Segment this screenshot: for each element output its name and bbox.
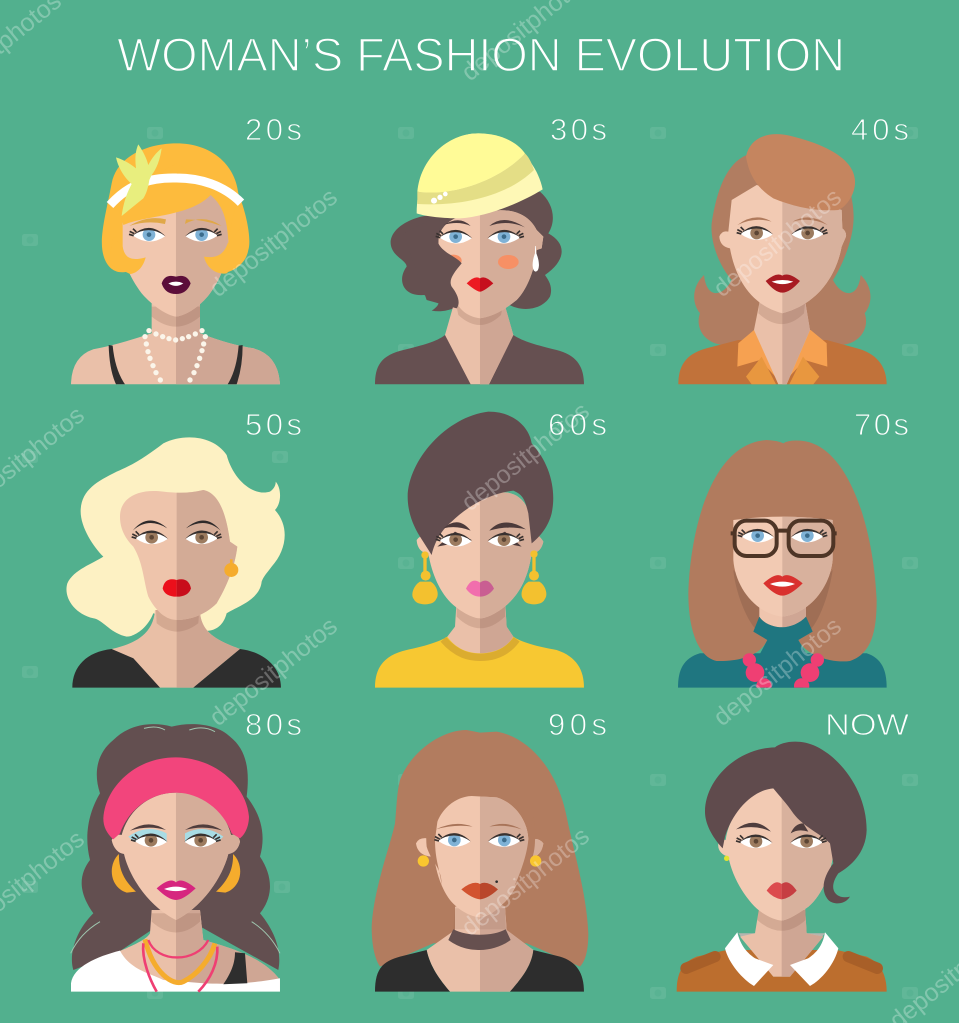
eyes 50s <box>132 530 222 544</box>
hair strands 80s <box>71 727 280 953</box>
lips 90s <box>461 883 498 899</box>
necklace 70s <box>742 653 824 688</box>
earring 30s <box>533 246 539 271</box>
face now <box>718 788 833 921</box>
portrait: 60s <box>375 412 584 688</box>
portrait: 90s <box>372 730 588 992</box>
brows 30s <box>443 220 525 227</box>
dress 30s <box>375 335 584 384</box>
beauty mark 90s <box>495 880 498 883</box>
portrait: now <box>677 742 887 992</box>
label: 20s: 20s <box>245 112 302 147</box>
lips 80s <box>157 880 196 900</box>
face 20s <box>123 193 228 317</box>
eyes 80s <box>131 833 221 847</box>
face 80s <box>112 793 240 920</box>
bust 50s <box>112 610 240 688</box>
lips 60s <box>466 581 494 597</box>
portrait: 40s <box>678 134 887 384</box>
lips now <box>767 882 797 899</box>
neck 60s <box>447 606 514 654</box>
brows 80s <box>130 824 223 831</box>
neck shadow 60s <box>457 607 505 628</box>
watermark: depositphotos <box>204 612 343 732</box>
lips 70s <box>763 575 803 596</box>
neck shadow 90s <box>453 908 506 929</box>
label: 30s: 30s <box>550 112 607 147</box>
eyes 70s <box>738 529 827 542</box>
brows 60s <box>443 522 526 531</box>
face 70s <box>733 517 833 617</box>
neck shadow 20s <box>152 307 200 327</box>
earrings 60s <box>412 550 546 604</box>
neck 30s <box>445 300 513 384</box>
dress 50s <box>72 649 281 688</box>
top 60s <box>375 637 584 688</box>
hat 30s <box>417 133 543 218</box>
fringe and curls 20s <box>108 163 245 274</box>
label: 90s: 90s <box>548 707 607 742</box>
label: 50s: 50s <box>245 407 302 442</box>
neck 70s <box>759 608 806 628</box>
hair 30s <box>391 192 562 311</box>
face 40s <box>719 185 846 313</box>
brows 50s <box>133 521 221 531</box>
jacket now <box>677 950 887 992</box>
eye shadow 70s <box>739 529 826 536</box>
watermark: depositphotos <box>456 397 595 517</box>
eyes 40s <box>737 226 828 240</box>
eyes 30s <box>436 230 524 243</box>
collar now <box>725 932 838 986</box>
headband 20s <box>110 178 241 205</box>
eyes 90s <box>434 833 524 847</box>
hair lock 30s <box>403 215 462 308</box>
label: 60s: 60s <box>548 407 607 442</box>
bust 80s <box>118 910 280 990</box>
blush 30s <box>445 255 519 269</box>
face 50s <box>120 490 237 620</box>
brows 20s <box>129 218 222 226</box>
jacket 40s <box>678 340 887 384</box>
portrait: 50s <box>66 437 285 688</box>
neck now <box>740 907 823 977</box>
headband 80s <box>103 757 249 839</box>
earrings 80s <box>112 854 240 893</box>
watermark: depositphotos <box>204 183 343 303</box>
earrings 90s <box>418 855 541 867</box>
hair 70s <box>688 440 877 661</box>
brows now <box>736 823 808 833</box>
neck shadow 40s <box>758 303 805 324</box>
hair 80s <box>72 724 279 970</box>
hair top 40s <box>746 134 855 210</box>
brows 90s <box>436 824 522 829</box>
watermark cameras <box>22 127 918 999</box>
hair 90s <box>372 730 588 967</box>
neck 40s <box>754 300 810 384</box>
portrait: 20s <box>71 143 280 384</box>
label: 70s: 70s <box>854 407 909 442</box>
collar 40s <box>737 330 827 384</box>
face 30s <box>438 210 543 318</box>
hair 60s <box>408 412 553 555</box>
earring 50s <box>224 559 238 577</box>
neck shadow 50s <box>156 610 199 632</box>
label: now: NOW <box>825 707 910 742</box>
hair 50s <box>66 437 285 637</box>
eye shadow 80s <box>128 829 223 842</box>
watermark: depositphotos <box>708 612 847 732</box>
hair back 20s <box>102 143 249 273</box>
eyes now <box>736 834 827 848</box>
turtleneck 70s <box>753 617 813 688</box>
hair now <box>705 742 867 903</box>
lips 30s <box>467 277 493 292</box>
portrait: 80s <box>71 724 280 992</box>
portrait: 30s <box>375 133 584 384</box>
strap 80s <box>223 952 247 984</box>
face 60s <box>417 492 543 618</box>
hair back 40s <box>694 155 870 345</box>
eyes 60s <box>436 532 524 547</box>
choker 90s <box>448 929 511 950</box>
lips 20s <box>162 276 191 294</box>
watermark: depositphotos <box>456 822 595 942</box>
necklace 20s <box>142 328 208 383</box>
bust 90s <box>427 907 533 992</box>
face 90s <box>416 796 543 917</box>
lapels 40s <box>746 357 819 384</box>
title: WOMAN’S FASHION EVOLUTION <box>117 28 845 81</box>
sweater 70s <box>678 653 887 688</box>
necklaces 80s <box>143 939 217 992</box>
flower 20s <box>116 144 162 216</box>
neck shadow 80s <box>152 913 200 932</box>
label: 40s: 40s <box>851 112 909 147</box>
hair locks 90s <box>426 802 536 885</box>
inner hair 70s <box>733 570 833 633</box>
neck shadow now <box>757 910 806 931</box>
neck shadow 30s <box>456 303 503 325</box>
glasses 70s <box>731 521 837 556</box>
lips 40s <box>766 274 800 293</box>
collar 60s <box>443 639 517 657</box>
top 90s <box>375 950 584 992</box>
shirt now <box>738 933 825 977</box>
eyes 20s <box>129 228 222 241</box>
epaulettes now <box>686 957 877 968</box>
watermark: depositphotos <box>708 183 847 303</box>
dress straps 20s <box>109 345 243 384</box>
portrait: 70s <box>678 440 887 694</box>
earring now <box>724 856 729 861</box>
top 80s <box>71 951 280 992</box>
label: 80s: 80s <box>245 707 302 742</box>
bust 20s <box>71 303 280 384</box>
brows 40s <box>737 217 828 225</box>
lips 50s <box>163 579 191 597</box>
